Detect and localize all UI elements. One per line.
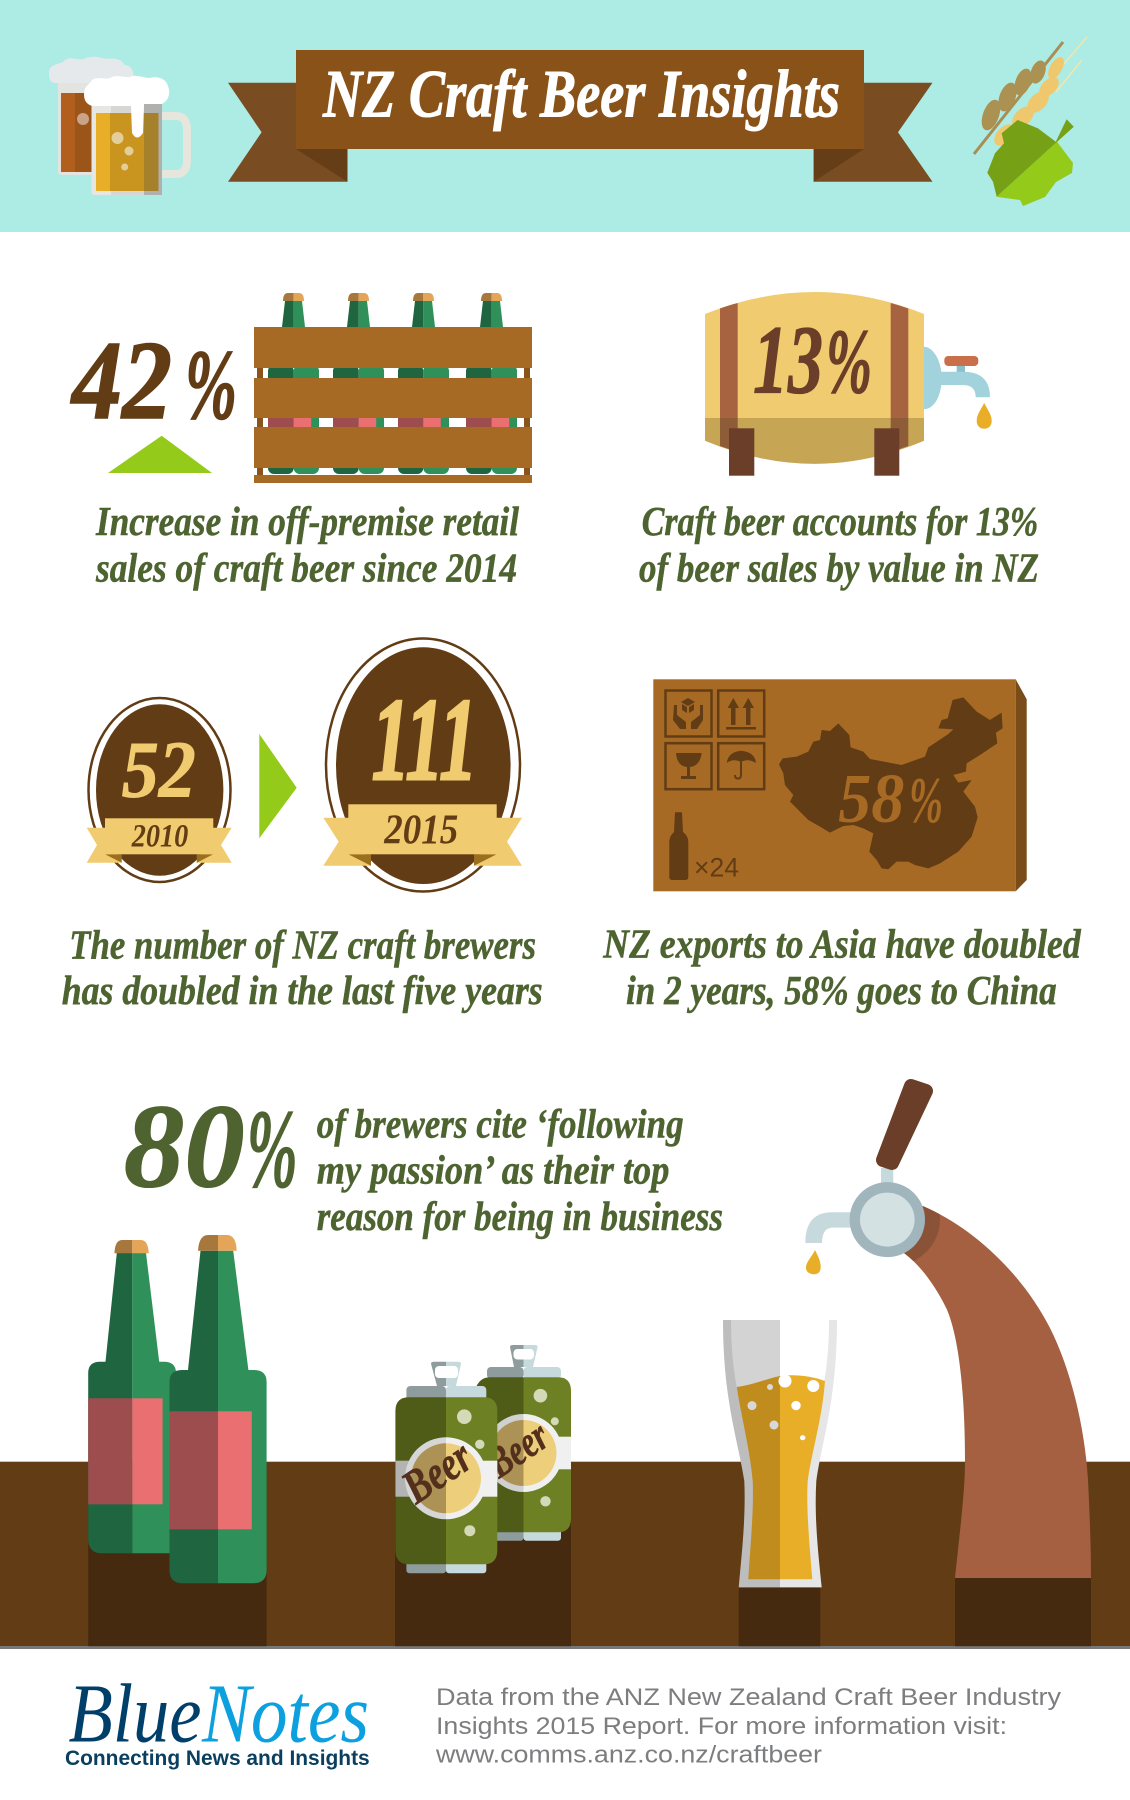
arrow: growth <box>259 734 297 838</box>
icon: hands and parcel <box>673 698 703 729</box>
tap handle <box>883 1086 926 1163</box>
ribbon 2015: 2015 <box>383 807 458 853</box>
stat: 80%: % <box>247 1088 298 1212</box>
caption: beer sales share <box>639 498 1039 591</box>
stat: 13%: 13 <box>753 307 823 414</box>
caption: number of brewers <box>62 921 543 1013</box>
ribbon 2010 <box>87 818 232 863</box>
icon: pint glass <box>723 1320 837 1587</box>
icon: back beer can: Beer <box>477 1411 558 1488</box>
stat: 42%: % <box>185 329 237 440</box>
icon: crate of bottles <box>254 293 532 483</box>
stat: 42% <box>70 319 237 443</box>
badge: 111 in 2015 <box>323 638 522 892</box>
beer fill <box>737 1376 780 1579</box>
source note: www.comms.anz.co.nz/craftbeer <box>435 1742 822 1769</box>
stat: 80%: 80 <box>124 1080 245 1212</box>
banner: title ribbon <box>228 50 932 182</box>
icon: up arrows <box>726 698 756 730</box>
drip <box>806 1250 821 1274</box>
caption: number of brewers: has doubled in the last five years <box>62 967 543 1013</box>
caption: retail increase <box>95 498 520 591</box>
caption: exports to Asia <box>602 921 1081 1013</box>
text: following my passion: reason for being in business <box>317 1193 723 1239</box>
badge: 52 in 2010 <box>87 698 232 882</box>
caption: number of brewers: The number of NZ craft brewers <box>69 921 536 967</box>
icon: front green bottle <box>170 1235 267 1583</box>
badge: 111 in 2015: 111 <box>372 674 477 805</box>
bottle 3 <box>398 293 449 474</box>
logo: BlueNotes <box>65 1668 370 1770</box>
icon: back beer can <box>475 1345 571 1541</box>
title: NZ Craft Beer Insights <box>322 56 840 132</box>
text: following my passion: of brewers cite ‘following <box>317 1100 684 1146</box>
bottle 1 <box>268 293 319 474</box>
icon: fragile glass <box>676 753 702 779</box>
icon: front beer can <box>392 1362 497 1573</box>
caption: beer sales share: of beer sales by value in NZ <box>639 545 1039 591</box>
spout <box>805 1212 852 1243</box>
panel: shipping box with China map <box>653 679 1027 891</box>
bar counter <box>0 1462 1130 1649</box>
stat: 58% <box>838 761 943 838</box>
source note: Insights 2015 Report. For more information visit: <box>436 1713 1007 1740</box>
logo: BlueNotes: Connecting News and Insights <box>65 1747 370 1770</box>
ribbon left tail <box>228 83 348 182</box>
icon: beer mugs <box>49 57 187 195</box>
stat: 42%: 42 <box>70 319 172 443</box>
caption: exports to Asia: in 2 years, 58% goes to China <box>626 967 1057 1013</box>
header band <box>0 0 1130 232</box>
bottle 2 <box>333 293 384 474</box>
ribbon right tail <box>814 83 932 182</box>
map: China <box>779 697 1003 869</box>
stat: 58%: 58 <box>838 761 904 838</box>
icon: back green bottle <box>88 1240 176 1553</box>
ribbon 2015 <box>323 804 522 866</box>
icon: wheat and hop leaf <box>974 37 1087 206</box>
caption: beer sales share: Craft beer accounts for 13% <box>642 498 1038 544</box>
text: following my passion: my passion’ as their top <box>317 1146 669 1192</box>
icon: green up arrow <box>108 436 212 473</box>
icon: bottle x24 <box>669 812 739 883</box>
badge: 52 in 2010: 52 <box>122 725 196 815</box>
stat: 80% <box>124 1080 298 1212</box>
icon: beer tap <box>805 1086 1091 1578</box>
icon: bottle x24: ×24 <box>694 853 739 883</box>
caption: retail increase: sales of craft beer since 2014 <box>95 545 517 591</box>
source note <box>435 1684 1061 1769</box>
logo: BlueNotes: Blue <box>68 1668 202 1761</box>
tap <box>924 347 992 429</box>
icon: barrel with tap <box>705 292 992 476</box>
bottle 4 <box>466 293 517 474</box>
icon: umbrella <box>727 751 756 779</box>
ribbon 2010: 2010 <box>131 819 188 855</box>
text: following my passion <box>317 1100 723 1239</box>
icon: handling grid <box>666 690 764 789</box>
logo: BlueNotes: Notes <box>201 1668 369 1761</box>
stat: 13%: % <box>826 311 872 413</box>
caption: retail increase: Increase in off-premise retail <box>95 498 520 544</box>
stat: 58%: % <box>909 764 943 837</box>
icon: front beer can: Beer <box>392 1429 483 1515</box>
source note: Data from the ANZ New Zealand Craft Beer Industry <box>436 1684 1061 1711</box>
